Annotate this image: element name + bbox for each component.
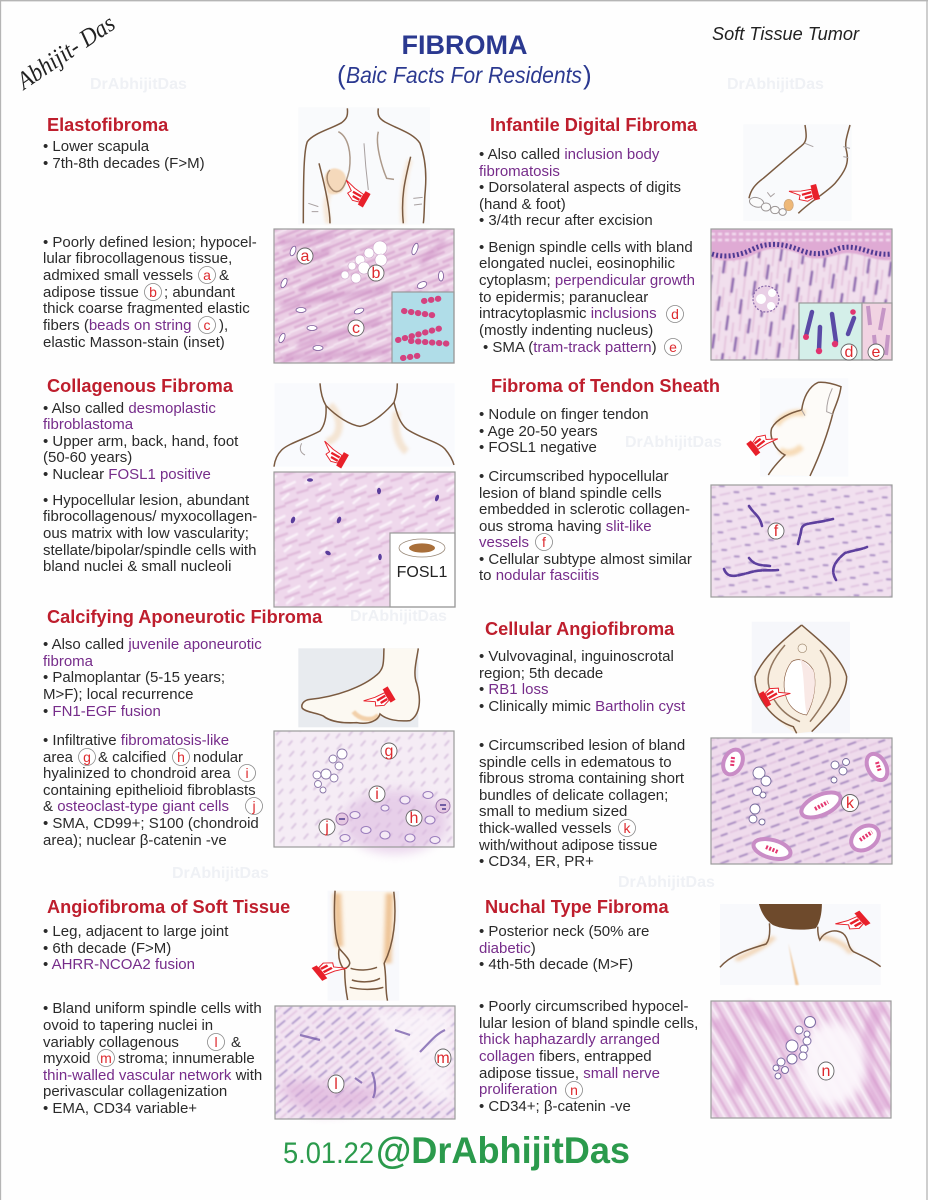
clinical facts: • Upper arm, back, hand, foot <box>43 433 239 450</box>
histology description: area <box>43 749 74 766</box>
inset: elastic Masson stain <box>392 292 454 363</box>
spindle cell description: intracytoplasmic <box>479 305 591 322</box>
histology description: vessels <box>479 534 529 551</box>
label f: f <box>774 523 779 540</box>
clinical facts: • Nodule on finger tendon <box>479 406 649 423</box>
micrograph: calcifying aponeurotic fibroma <box>274 731 454 854</box>
clinical facts: • Lower scapula <box>43 138 150 155</box>
inline marker k: k <box>624 820 632 836</box>
histology description: fibrocollagenous/ myxocollagen- <box>43 508 257 525</box>
histology description: • Hypocellular lesion, abundant <box>43 492 250 509</box>
micrograph: elastofibroma <box>274 229 454 363</box>
histology description: containing epithelioid fibroblasts <box>43 782 256 799</box>
clinical facts: • 7th-8th decades (F>M) <box>43 155 205 172</box>
label f <box>768 523 784 540</box>
inline markers a b c: c <box>204 317 210 333</box>
inline markers d e <box>664 306 684 356</box>
panel: Cellular Angiofibroma <box>478 619 892 870</box>
inline markers g h i j <box>78 748 262 814</box>
inline markers a b c: a <box>203 267 211 283</box>
clinical facts: • 4th-5th decade (M>F) <box>479 956 633 973</box>
labels a b c: a <box>301 248 310 265</box>
histology description: adipose tissue, <box>479 1065 583 1082</box>
clinical facts: • Also called <box>479 146 564 163</box>
histology description: • SMA, CD99+; S100 (chondroid <box>43 815 259 832</box>
clinical facts: • Nuclear <box>43 466 108 483</box>
clinical facts: • <box>43 956 52 973</box>
clinical facts: fibroblastoma <box>43 416 134 433</box>
inset: tram-track <box>862 303 892 360</box>
clinical facts: • Vulvovaginal, inguinoscrotal <box>479 648 674 665</box>
subtitle: ) <box>583 60 592 90</box>
poorly defined lesion description: elastic Masson-stain (inset) <box>43 334 225 351</box>
micrograph: cellular angiofibroma <box>711 738 892 864</box>
clinical facts: • <box>479 681 488 698</box>
illustration: vulvovaginal region <box>752 622 850 733</box>
histology description: osteoclast-type giant cells <box>57 798 229 815</box>
clinical facts: fibroma <box>43 653 94 670</box>
clinical facts: • Also called <box>43 400 128 417</box>
histology description: thin-walled vascular network <box>43 1067 232 1084</box>
histology description: & <box>231 1034 241 1051</box>
histology description: stroma; innumerable <box>118 1050 255 1067</box>
histology description: perivascular collagenization <box>43 1083 227 1100</box>
footer date and handle: @DrAbhijitDas <box>376 1130 630 1171</box>
panel: Infantile Digital Fibroma <box>479 115 892 361</box>
histology description: fibrous stroma containing short <box>479 770 685 787</box>
labels d e <box>841 344 884 361</box>
heading: Cellular Angiofibroma <box>485 619 675 639</box>
spindle cell description: to epidermis; paranuclear <box>479 289 648 306</box>
histology description: & <box>43 798 57 815</box>
footer date and handle: 5.01.22 <box>283 1137 374 1170</box>
spindle cell description: • SMA ( <box>483 339 533 356</box>
inline marker k <box>618 820 636 836</box>
panel: Nuchal Type Fibroma <box>479 897 891 1118</box>
spindle cell description: perpendicular growth <box>555 272 695 289</box>
gland <box>753 286 779 312</box>
inline markers g h i j: j <box>251 798 256 814</box>
spindle cell description: tram-track pattern) <box>533 339 657 356</box>
poorly defined lesion description: beads on string <box>89 317 191 334</box>
micrograph: collagenous fibroma <box>274 472 455 607</box>
inline markers l m <box>98 1034 224 1066</box>
labels g h i j: g <box>385 743 393 760</box>
labels g h i j: j <box>324 819 329 836</box>
clinical facts: • Dorsolateral aspects of digits <box>479 179 681 196</box>
histology description: • EMA, CD34 variable+ <box>43 1100 197 1117</box>
poorly defined lesion description: ; abundant <box>164 284 236 301</box>
subtitle: Baic Facts For Residents <box>346 62 582 88</box>
histology description: bland nuclei & small nucleoli <box>43 558 231 575</box>
clinical facts: • 6th decade (F>M) <box>43 940 171 957</box>
clinical facts: FOSL1 positive <box>108 466 211 483</box>
heading: Angiofibroma of Soft Tissue <box>47 897 290 917</box>
watermarks: DrAbhijitDas <box>90 76 187 93</box>
histology description: area); nuclear β-catenin -ve <box>43 832 227 849</box>
histology description: • CD34, ER, PR+ <box>479 853 594 870</box>
histology description: bundles of delicate collagen; <box>479 787 668 804</box>
inline markers a b c: b <box>149 284 157 300</box>
inline marker f <box>536 534 552 550</box>
histology description: thick-walled vessels <box>479 820 612 837</box>
histology description: hyalinized to chondroid area <box>43 765 231 782</box>
illustration: foot with toe lesion <box>743 124 852 221</box>
micrograph: infantile digital fibroma <box>711 229 892 361</box>
clinical facts: ) <box>531 940 536 957</box>
histology description: • Circumscribed lesion of bland <box>479 737 685 754</box>
histology description: with <box>231 1067 262 1084</box>
watermarks: DrAbhijitDas <box>172 865 269 882</box>
clinical facts: • Also called <box>43 636 128 653</box>
label k: k <box>846 795 855 812</box>
spindle cell description: inclusions <box>591 305 657 322</box>
labels l m: l <box>334 1076 338 1093</box>
clinical facts: • Age 20-50 years <box>479 423 598 440</box>
clinical facts: desmoplastic <box>128 400 216 417</box>
histology description: variably collagenous <box>43 1034 179 1051</box>
panel: Collagenous Fibroma <box>43 376 455 607</box>
inline markers g h i j: h <box>177 749 185 765</box>
spindle cell description: elongated nuclei, eosinophilic <box>479 255 675 272</box>
histology description: fibers, entrapped <box>535 1048 652 1065</box>
labels d e: d <box>845 344 853 361</box>
histology description: • Circumscribed hypocellular <box>479 468 668 485</box>
clinical facts: inclusion body <box>564 146 660 163</box>
panel: Fibroma of Tendon Sheath <box>479 376 892 597</box>
histology description: with/without adipose tissue <box>478 837 657 854</box>
histology description: small to medium sized <box>479 803 627 820</box>
vessels <box>719 746 892 863</box>
histology description: lular lesion of bland spindle cells, <box>479 1015 698 1032</box>
histology description: slit-like <box>606 518 652 535</box>
histology description: ous matrix with low vascularity; <box>43 525 249 542</box>
histology description: collagen <box>479 1048 535 1065</box>
subtitle: ( <box>337 60 346 90</box>
watermarks: DrAbhijitDas <box>350 608 447 625</box>
clinical facts: • 3/4th recur after excision <box>479 212 653 229</box>
watermarks: DrAbhijitDas <box>625 434 722 451</box>
poorly defined lesion description: admixed small vessels <box>43 267 193 284</box>
clinical facts: • Clinically mimic <box>479 698 595 715</box>
inset: inclusions <box>799 303 862 360</box>
histology description: nodular fasciitis <box>496 567 599 584</box>
illustration: posterior neck <box>720 904 881 985</box>
histology description: nodular <box>193 749 243 766</box>
labels l m: m <box>436 1050 450 1067</box>
inline marker f: f <box>542 534 546 550</box>
labels a b c: b <box>372 265 381 282</box>
watermarks <box>90 76 824 891</box>
clinical facts: region; 5th decade <box>479 665 603 682</box>
histology description: • Bland uniform spindle cells with <box>43 1000 262 1017</box>
histology description: • Infiltrative <box>43 732 121 749</box>
heading: Nuchal Type Fibroma <box>485 897 669 917</box>
histology description: & calcified <box>98 749 166 766</box>
micrograph: tendon sheath <box>711 485 892 597</box>
histology description: • Poorly circumscribed hypocel- <box>479 998 688 1015</box>
inline marker n <box>566 1082 582 1098</box>
heading: Calcifying Aponeurotic Fibroma <box>47 607 323 627</box>
poorly defined lesion description: thick coarse fragmented elastic <box>43 300 250 317</box>
spindle cell description: (mostly indenting nucleus) <box>479 322 653 339</box>
histology description: • Cellular subtype almost similar <box>479 551 692 568</box>
histology description: to <box>479 567 496 584</box>
labels g h i j: i <box>375 786 379 803</box>
histology description: proliferation <box>479 1081 557 1098</box>
inset: FOSL1 <box>390 533 455 607</box>
histology description: myxoid <box>43 1050 91 1067</box>
illustration: neck and shoulder <box>274 383 455 468</box>
panel: Angiofibroma of Soft Tissue <box>43 891 455 1119</box>
clinical facts: (50-60 years) <box>43 449 132 466</box>
poorly defined lesion description: ), <box>219 317 228 334</box>
heading: Fibroma of Tendon Sheath <box>491 376 720 396</box>
inline markers g h i j: i <box>245 765 249 781</box>
heading: Collagenous Fibroma <box>47 376 234 396</box>
histology description: small nerve <box>583 1065 660 1082</box>
histology description: ovoid to tapering nuclei in <box>43 1017 213 1034</box>
micrograph: nuchal type fibroma <box>711 1001 891 1118</box>
clinical facts: RB1 loss <box>488 681 548 698</box>
histology description: • CD34+; β-catenin -ve <box>479 1098 631 1115</box>
histology description: fibromatosis-like <box>121 732 229 749</box>
clinical facts: diabetic <box>479 940 531 957</box>
clinical facts: M>F); local recurrence <box>43 686 193 703</box>
histology description: stellate/bipolar/spindle cells with <box>43 542 256 559</box>
clinical facts: Bartholin cyst <box>595 698 686 715</box>
poorly defined lesion description: & <box>219 267 229 284</box>
clinical facts: FN1-EGF fusion <box>52 703 161 720</box>
inline markers a b c <box>144 266 216 334</box>
panel: Elastofibroma <box>43 107 454 363</box>
clinical facts: • <box>43 703 52 720</box>
inline markers l m: l <box>214 1034 218 1050</box>
category label: Soft Tissue Tumor <box>712 24 860 44</box>
inline markers d e: d <box>671 306 679 322</box>
clinical facts: • Leg, adjacent to large joint <box>43 923 229 940</box>
clinical facts: juvenile aponeurotic <box>127 636 262 653</box>
inline markers d e: e <box>669 339 677 355</box>
clinical facts: (hand & foot) <box>479 196 566 213</box>
watermarks: DrAbhijitDas <box>618 874 715 891</box>
inline markers l m: m <box>100 1050 112 1066</box>
heading: Infantile Digital Fibroma <box>490 115 698 135</box>
histology description: lesion of bland spindle cells <box>479 485 662 502</box>
inline marker n: n <box>570 1082 578 1098</box>
title: FIBROMA <box>402 30 527 60</box>
label n <box>818 1062 834 1080</box>
inset: FOSL1: FOSL1 <box>397 564 447 581</box>
clinical facts: AHRR-NCOA2 fusion <box>52 956 195 973</box>
histology description: embedded in sclerotic collagen- <box>479 501 690 518</box>
poorly defined lesion description: • Poorly defined lesion; hypocel- <box>43 234 257 251</box>
poorly defined lesion description: lular fibrocollagenous tissue, <box>43 250 232 267</box>
histology description: ous stroma having <box>479 518 606 535</box>
micrograph: angiofibroma of soft tissue <box>275 1006 455 1119</box>
labels d e: e <box>872 344 881 361</box>
labels a b c: c <box>352 320 360 337</box>
heading: Elastofibroma <box>47 115 169 135</box>
spindle cell description: cytoplasm; <box>479 272 555 289</box>
inline markers g h i j: g <box>83 749 91 765</box>
panel: Calcifying Aponeurotic Fibroma <box>43 607 454 854</box>
label n: n <box>822 1063 830 1080</box>
labels a b c <box>297 248 384 337</box>
label k <box>842 794 858 812</box>
clinical facts: fibromatosis <box>479 163 560 180</box>
watermarks: DrAbhijitDas <box>727 76 824 93</box>
illustration: foot with plantar lesion <box>298 648 419 727</box>
histology description: spindle cells in edematous to <box>479 754 672 771</box>
labels l m <box>328 1049 451 1093</box>
clinical facts: • Posterior neck (50% are <box>479 923 649 940</box>
labels g h i j <box>319 743 422 836</box>
signature: Abhijit- Das <box>11 10 120 96</box>
clinical facts: • Palmoplantar (5-15 years; <box>43 669 225 686</box>
poorly defined lesion description: adipose tissue <box>43 284 139 301</box>
labels g h i j: h <box>410 810 418 827</box>
histology description: thick haphazardly arranged <box>479 1031 660 1048</box>
clinical facts: • FOSL1 negative <box>479 439 597 456</box>
spindle cell description: • Benign spindle cells with bland <box>479 239 693 256</box>
illustration: finger nodule <box>746 378 848 477</box>
poorly defined lesion description: fibers ( <box>43 317 89 334</box>
illustration: back with lesion <box>298 107 430 225</box>
illustration: leg with knee lesion <box>312 891 399 1001</box>
